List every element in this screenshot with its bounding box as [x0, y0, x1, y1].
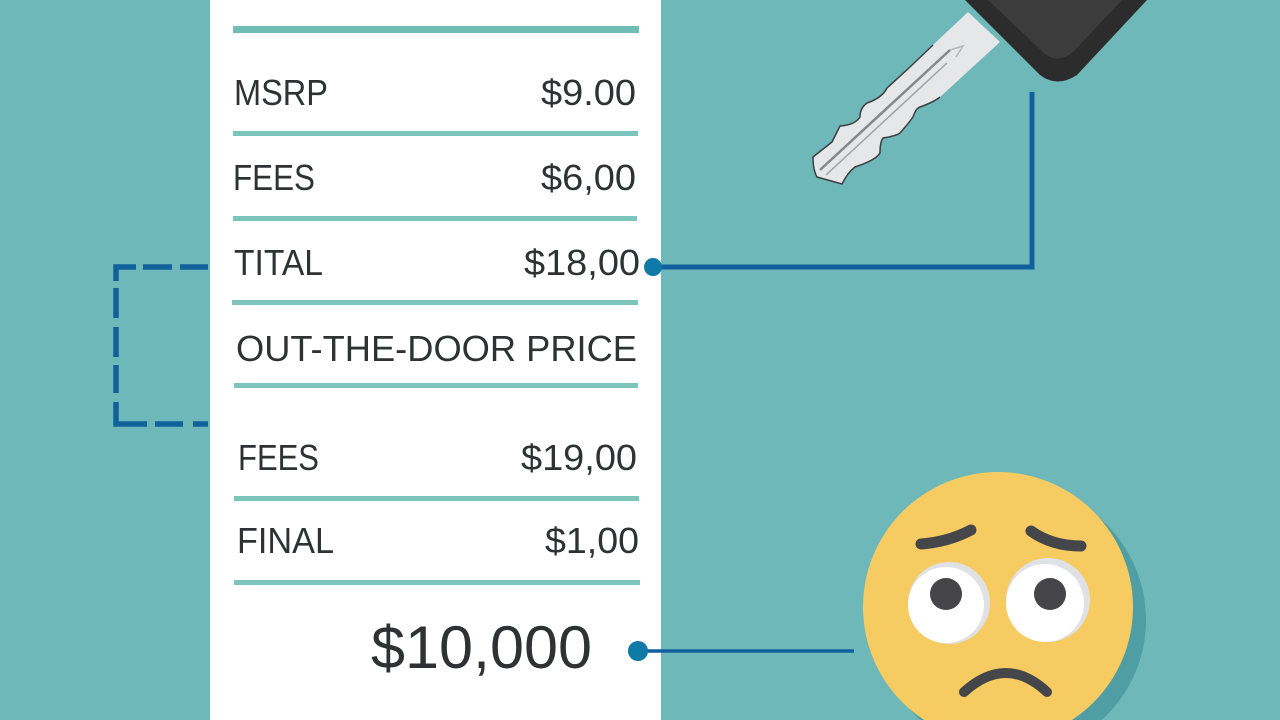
left eye — [908, 562, 990, 644]
row: MSRP — [234, 72, 636, 113]
panel: receipt — [210, 0, 661, 720]
dashed bracket connector — [116, 267, 208, 424]
row: fees second: FEES — [238, 437, 319, 478]
row: fees second: $19,00 — [521, 437, 637, 478]
final amount: $10,000 — [371, 614, 592, 681]
row: fees — [233, 157, 636, 198]
connector: total to car key — [644, 92, 1032, 276]
right eye — [1006, 558, 1090, 642]
row: total: $18,00 — [524, 242, 640, 283]
row: final: $1,00 — [545, 520, 639, 561]
row: final — [237, 520, 639, 561]
icon: worried face — [863, 472, 1146, 720]
connector: final amount to face — [628, 641, 854, 661]
eyebrows — [921, 530, 1081, 546]
row: fees: FEES — [233, 157, 315, 198]
icon: car key — [813, 0, 1147, 184]
row: total — [234, 242, 640, 283]
row: fees: $6,00 — [541, 157, 636, 198]
row: final: FINAL — [237, 520, 334, 561]
row: fees second — [238, 437, 637, 478]
mouth — [964, 673, 1047, 692]
row: MSRP: $9.00 — [541, 72, 636, 113]
key fob — [965, 0, 1147, 82]
key blade — [813, 12, 1000, 184]
row: total: TITAL — [234, 242, 323, 283]
row: MSRP: MSRP — [234, 72, 328, 113]
heading: out-the-door price: OUT-THE-DOOR PRICE — [236, 328, 637, 369]
